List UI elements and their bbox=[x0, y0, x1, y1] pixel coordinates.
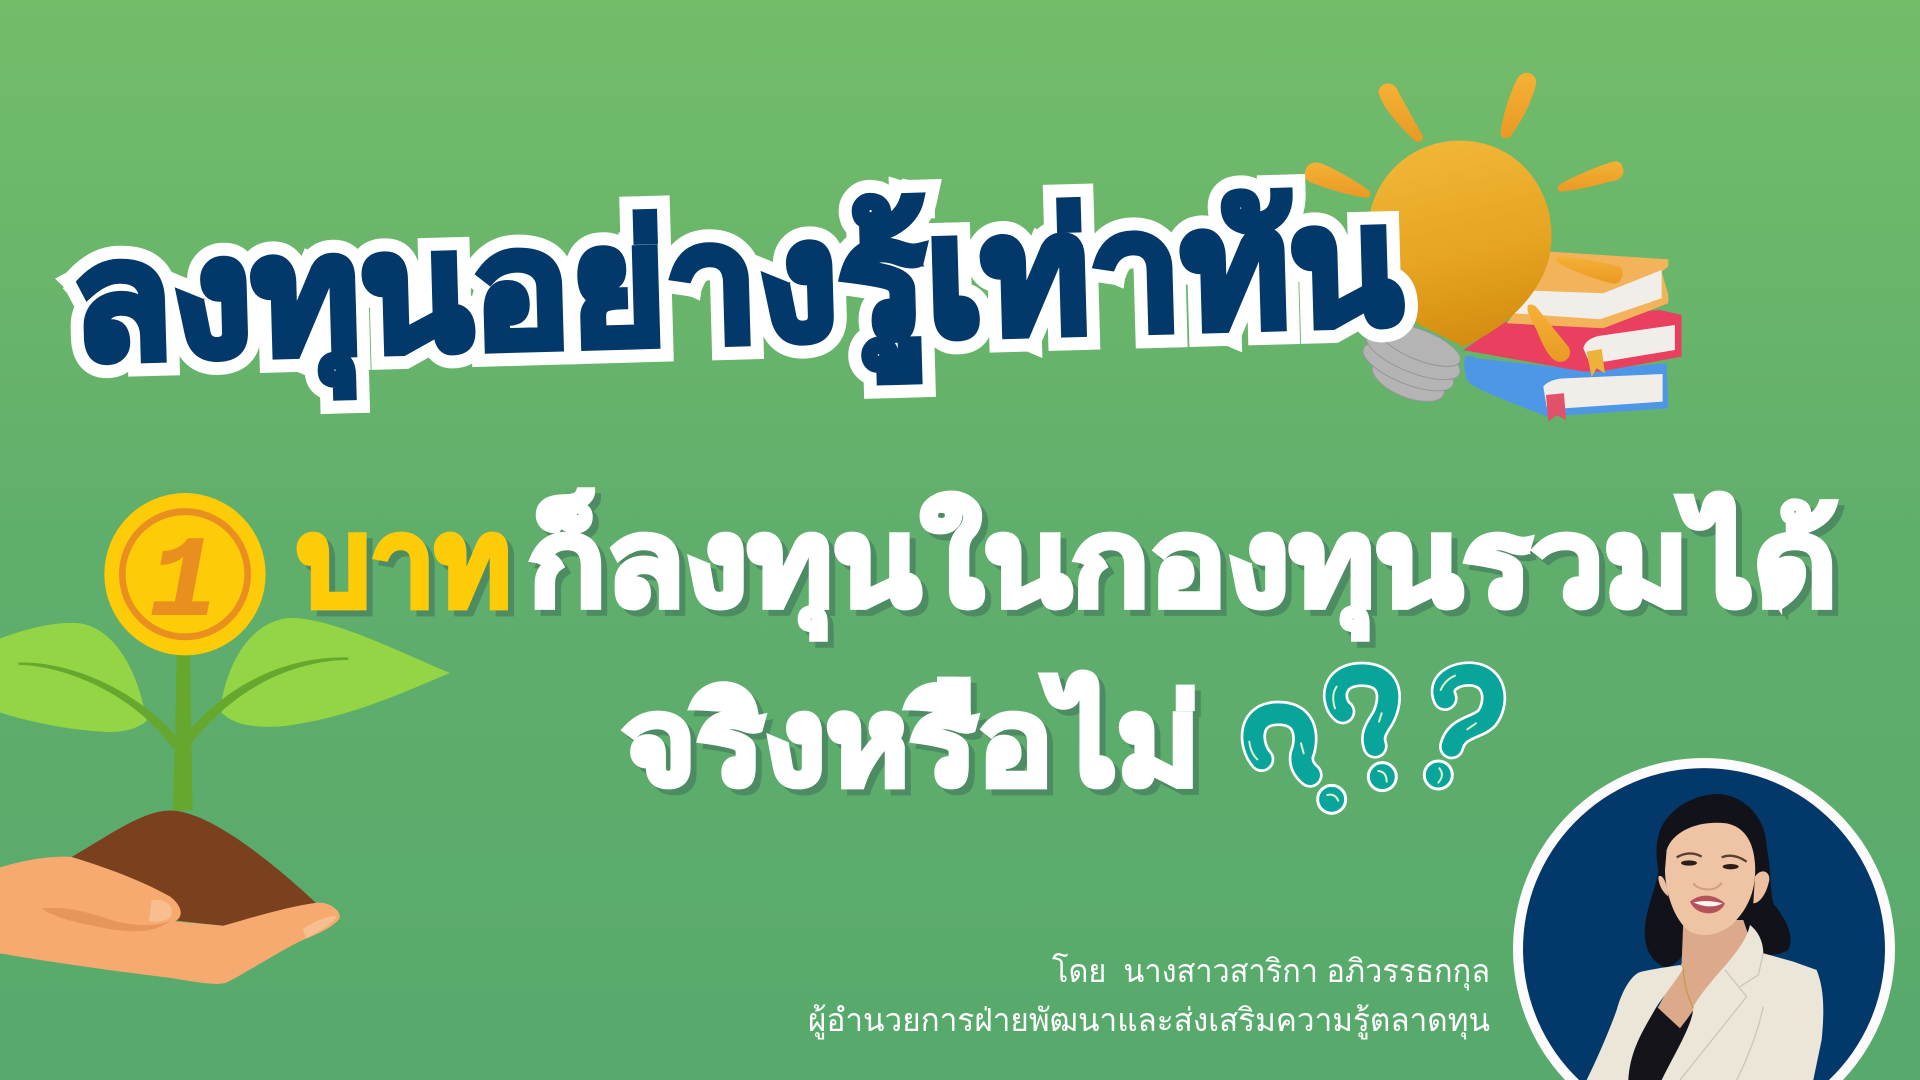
headline line 2: จริงหรือไม่ bbox=[622, 673, 1200, 810]
plant stem and leaves bbox=[0, 618, 450, 811]
byline bbox=[808, 953, 1490, 1040]
icon: red book bbox=[1463, 310, 1682, 377]
soil bbox=[72, 811, 317, 926]
icon: bulb screw base bbox=[1357, 315, 1466, 410]
headline line 1: บาท bbox=[297, 495, 511, 631]
hand bbox=[0, 857, 340, 984]
author position: ผู้อำนวยการฝ่ายพัฒนาและส่งเสริมความรู้ตลาดทุน bbox=[808, 1002, 1490, 1040]
icon: one baht coin: 1 bbox=[150, 519, 216, 648]
title: ลงทุนอย่างรู้เท่าทัน bbox=[69, 174, 1404, 405]
portrait: speaker in circle bbox=[1513, 758, 1895, 1080]
icon: bulb rays bbox=[1305, 73, 1623, 362]
icon: orange book bbox=[1507, 252, 1668, 328]
icon: blue book bbox=[1464, 356, 1668, 422]
headline line 1: ก็ลงทุนในกองทุนรวมได้ bbox=[528, 490, 1837, 639]
illustration: coin plant in hand bbox=[0, 493, 450, 984]
icon: bulb glass bbox=[1368, 141, 1552, 347]
icon: question marks bbox=[1249, 674, 1494, 813]
icon: light bulb and books bbox=[1305, 73, 1682, 422]
author name: โดย นางสาวสาริกา อภิวรรธกกุล bbox=[1052, 953, 1490, 991]
icon: one baht coin bbox=[104, 493, 266, 655]
title: ลงทุนอย่างรู้เท่าทัน bbox=[69, 174, 1404, 405]
